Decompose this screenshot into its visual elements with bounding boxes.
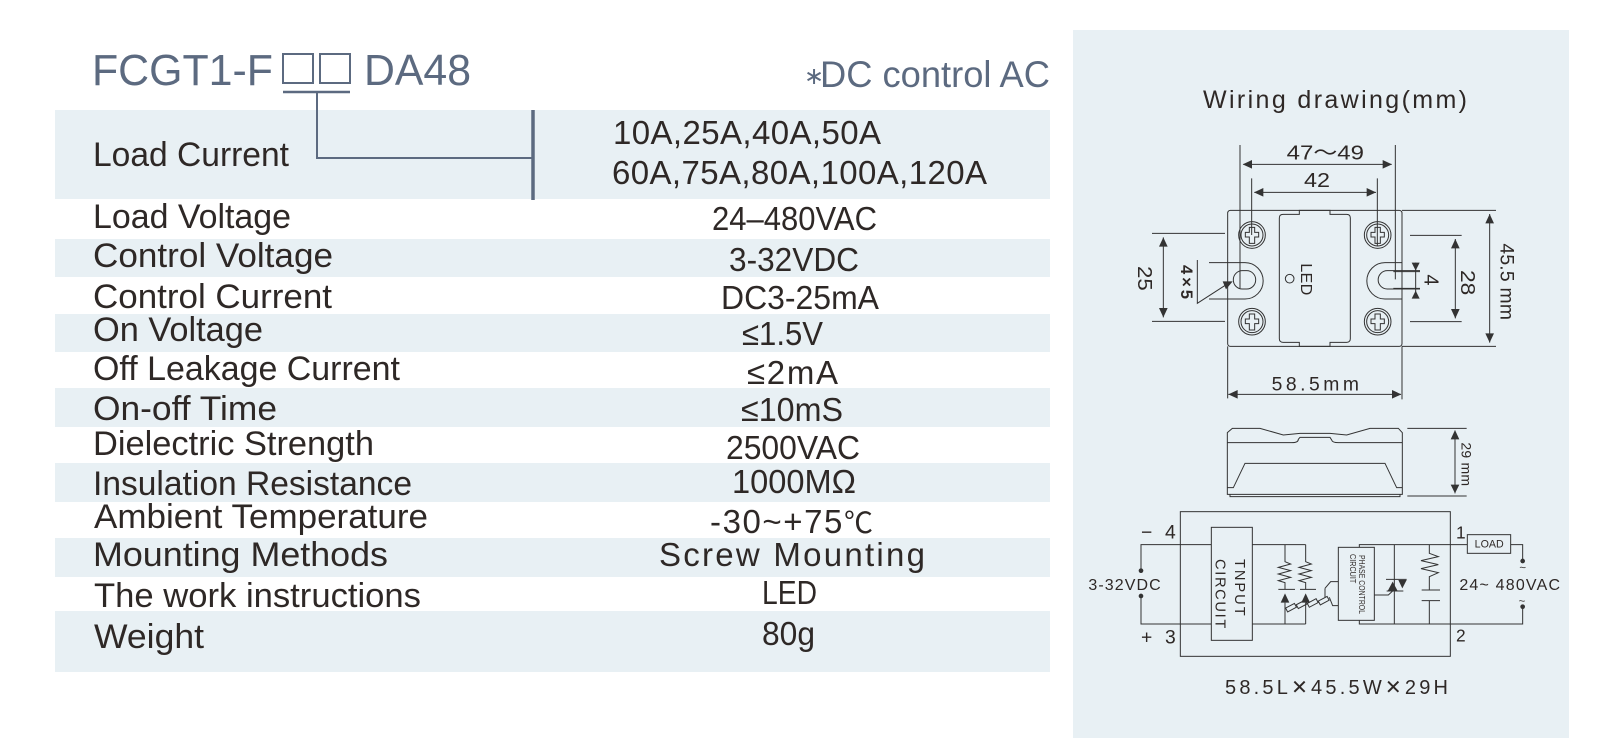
row: Load Current: 10A,25A,40A,50A xyxy=(613,114,881,151)
row: Dielectric Strength: Dielectric Strength xyxy=(93,425,374,463)
schematic labels: ~ xyxy=(1519,562,1526,574)
dimensions caption: 58.5L✕45.5W✕29H xyxy=(1225,675,1448,699)
row: Insulation Resistance xyxy=(93,463,856,503)
schematic labels: 24~ 480VAC xyxy=(1459,577,1560,594)
row: On Voltage: On Voltage xyxy=(93,311,263,349)
row: Off Leakage Current xyxy=(93,350,838,391)
relay body outline xyxy=(1209,210,1420,346)
row: Dielectric Strength: 2500VAC xyxy=(726,429,860,466)
dimension labels: 4×5 xyxy=(1177,265,1196,299)
schematic labels: CIRCUIT xyxy=(1212,559,1228,628)
schematic labels: 2 xyxy=(1456,626,1466,646)
row: Control Voltage: 3-32VDC xyxy=(729,241,859,278)
side view drawing xyxy=(1227,428,1475,497)
row: Weight xyxy=(94,615,815,656)
row: Control Current xyxy=(93,278,879,316)
dimension lines xyxy=(1152,145,1496,399)
dimension labels: 47～49 xyxy=(1287,142,1364,164)
bracket connector from model number to load current xyxy=(283,92,533,200)
row: The work instructions xyxy=(94,574,817,615)
row: Ambient Temperature: -30~+75℃ xyxy=(710,503,873,540)
row: Control Current: DC3-25mA xyxy=(721,279,879,316)
schematic labels: 4 xyxy=(1165,522,1176,543)
row: Control Voltage xyxy=(93,237,859,278)
dimension labels: 28 xyxy=(1456,270,1479,295)
row: Weight: 80g xyxy=(762,615,815,652)
title: model number: DA48 xyxy=(364,46,471,95)
row: The work instructions: The work instructions xyxy=(94,577,421,615)
height label: 29 mm xyxy=(1459,442,1475,486)
top view dimension drawing xyxy=(1133,142,1517,399)
schematic labels: − xyxy=(1141,522,1152,543)
dimension labels: 4 xyxy=(1419,274,1441,285)
side profile xyxy=(1227,428,1402,497)
row: Insulation Resistance: Insulation Resistance xyxy=(93,465,412,503)
row: Off Leakage Current: Off Leakage Current xyxy=(93,350,401,388)
dimension labels: 42 xyxy=(1304,170,1330,192)
row: On-off Time: ≤10mS xyxy=(741,391,843,428)
schematic labels: TNPUT xyxy=(1231,559,1247,616)
row: Off Leakage Current: ≤2mA xyxy=(747,354,838,391)
LED label: LED xyxy=(1297,263,1314,295)
row: Insulation Resistance: 1000MΩ xyxy=(732,463,856,500)
row: Mounting Methods: Mounting Methods xyxy=(93,536,388,574)
relay enclosure and wires xyxy=(1141,512,1523,656)
row: Mounting Methods: Screw Mounting xyxy=(659,536,925,573)
title: model number xyxy=(92,46,471,95)
schematic labels: ~ xyxy=(1519,595,1526,607)
height dimension xyxy=(1407,428,1467,496)
row: On Voltage: ≤1.5V xyxy=(742,315,823,352)
schematic labels: + xyxy=(1141,627,1152,648)
dimension labels xyxy=(1133,142,1517,396)
schematic labels: 3 xyxy=(1165,627,1176,648)
row: On-off Time xyxy=(93,390,843,428)
schematic labels: LOAD xyxy=(1475,539,1504,551)
subtitle: DC control AC: DC control AC xyxy=(820,54,1050,95)
row: Control Current: Control Current xyxy=(93,278,333,316)
row: Load Current: Load Current xyxy=(93,136,290,174)
dimension labels: 45.5 mm xyxy=(1496,243,1517,320)
row: Mounting Methods xyxy=(93,536,925,574)
table row backgrounds xyxy=(55,110,1050,672)
row: Dielectric Strength xyxy=(93,425,860,466)
subtitle: DC control AC: ∗ xyxy=(804,63,824,90)
row: On Voltage xyxy=(93,311,823,352)
row: Ambient Temperature: Ambient Temperature xyxy=(94,498,428,536)
row: Ambient Temperature xyxy=(94,498,873,540)
row: Load Current xyxy=(93,114,987,191)
row: The work instructions: LED xyxy=(762,574,817,611)
circuit schematic xyxy=(1088,512,1560,656)
schematic labels xyxy=(1088,522,1560,648)
row: On-off Time: On-off Time xyxy=(93,390,277,428)
schematic labels: 3-32VDC xyxy=(1088,577,1161,594)
semiconductor symbols and terminals xyxy=(1139,559,1525,609)
title: model number: FCGT1-F xyxy=(92,46,273,95)
panel: wiring drawing background xyxy=(1073,30,1569,738)
dimension labels: 58.5mm xyxy=(1272,375,1359,396)
screws xyxy=(1239,222,1391,335)
row: Load Voltage xyxy=(93,198,877,237)
row: Control Voltage: Control Voltage xyxy=(93,237,333,275)
schematic labels: 1 xyxy=(1456,522,1466,542)
dimension labels: 25 xyxy=(1133,266,1156,291)
dimension arrowheads xyxy=(1159,160,1494,399)
row: Load Current: 60A,75A,80A,100A,120A xyxy=(612,154,987,191)
row: Load Voltage: Load Voltage xyxy=(93,198,291,236)
row: Load Voltage: 24–480VAC xyxy=(712,200,877,237)
heading: wiring drawing: Wiring drawing(mm) xyxy=(1203,86,1467,114)
row: Weight: Weight xyxy=(94,618,205,656)
schematic labels: PHASE CONTROL xyxy=(1357,555,1367,614)
schematic labels: CIRCUIT xyxy=(1348,554,1358,584)
